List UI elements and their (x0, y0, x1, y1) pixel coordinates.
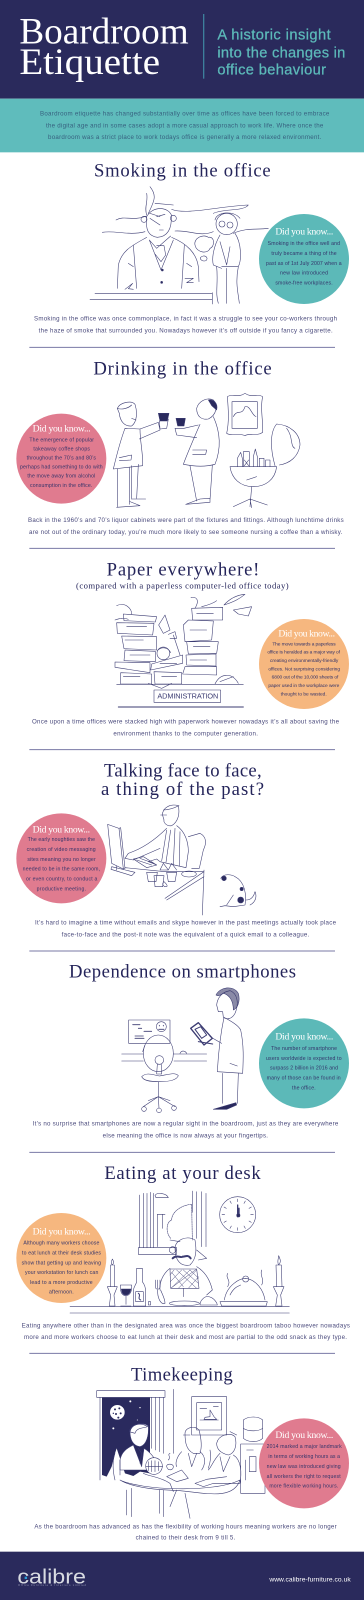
header banner (0, 0, 364, 99)
logo: Office Furniture & Interiors Limited (18, 1583, 87, 1587)
body text (34, 316, 338, 334)
callout: throughout the 70’s and 80’s (27, 456, 96, 462)
callout: your workstation for lunch can (25, 1270, 98, 1276)
callout: creating environmentally-friendly (270, 658, 339, 664)
body text: are not out of the ordinary today, you’re much more likely to see someone nursing a coffee than a whisky. (29, 529, 343, 536)
intro panel (0, 99, 364, 152)
callout: 2014 marked a major landmark (267, 1444, 342, 1450)
illustration: paper stacks (115, 594, 252, 707)
section: paper (32, 560, 349, 737)
callout: lead to a more productive (30, 1280, 93, 1286)
subtitle: A historic insight (217, 27, 331, 43)
callout: users worldwide is expected to (266, 1056, 342, 1062)
section: smartphones (33, 962, 349, 1139)
callout: new law introduced (280, 271, 328, 277)
intro panel: Boardroom etiquette has changed substantially over time as offices have been forced to embrace (40, 110, 330, 117)
callout: Did you know... (33, 825, 90, 836)
callout: Did you know... (33, 424, 91, 435)
callout: in terms of working hours as a (268, 1454, 340, 1460)
callout: smoke-free workplaces. (275, 280, 333, 286)
body text (22, 1322, 350, 1341)
body text (28, 517, 344, 536)
title (19, 10, 189, 82)
illustration: chef eating at desk (70, 1191, 289, 1313)
heading: Drinking in the office (93, 358, 272, 379)
callout: perhaps had something to do with (20, 465, 103, 471)
body text: else meaning the office is now always at your fingertips. (103, 1132, 268, 1139)
callout: truly became a thing of the (271, 251, 337, 257)
callout: thought to be wasted. (281, 691, 327, 697)
body text (33, 1121, 339, 1139)
callout: the move away from alcohol (27, 474, 95, 480)
footer (0, 1552, 364, 1600)
body text: Once upon a time offices were stacked high with paperwork however nowadays it’s all about saving the (32, 718, 340, 725)
callout: all workers the right to request (267, 1474, 341, 1480)
callout: to eat lunch at their desk studies (22, 1250, 101, 1256)
heading (101, 761, 264, 800)
website url: www.calibre-furniture.co.uk (268, 1576, 351, 1583)
night window (102, 1398, 150, 1477)
body text: more and more workers choose to eat lunch at their desk and most are partial to the odd snack as they type. (24, 1334, 347, 1341)
callout: paper used in the workplace were (268, 683, 340, 689)
callout: The emergence of popular (29, 438, 94, 444)
heading: Dependence on smartphones (69, 962, 296, 983)
callout: takeaway coffee shops (33, 447, 90, 453)
section: eating (16, 1163, 350, 1341)
intro panel: boardroom was a strict place to work todays office is generally a more relaxed environment. (48, 134, 322, 141)
section: face to face (16, 761, 337, 938)
body text (35, 920, 337, 938)
section: timekeeping (34, 1365, 349, 1542)
body text (32, 718, 340, 737)
callout (16, 414, 106, 504)
callout: many of those can be found in (267, 1076, 341, 1082)
illustration: smoking men (90, 187, 268, 304)
body text: Back in the 1960’s and 70’s liquor cabinets were part of the fixtures and fittings. Although lunchtime drinks (28, 517, 344, 524)
title: Boardroom (19, 10, 189, 51)
callout: Did you know... (275, 226, 333, 237)
callout (16, 1213, 106, 1303)
heading: Talking face to face, (104, 761, 262, 782)
callout: more flexible working hours. (269, 1484, 338, 1490)
illustration: man at computer (108, 805, 256, 915)
body text: face-to-face and the post-it note was the equivalent of a quick email to a colleague. (62, 931, 310, 938)
callout (259, 214, 349, 304)
illustration: men toasting and globe bar (113, 393, 300, 508)
callout: offices. Not surprising considering (268, 666, 340, 672)
callout: consumption in the office. (30, 483, 92, 489)
subtitle (217, 27, 345, 79)
callout: The number of smartphone (271, 1046, 337, 1052)
callout: productive meeting. (37, 886, 86, 892)
section: smoking (34, 161, 349, 334)
body text: Eating anywhere other than in the designated area was once the biggest boardroom taboo however nowadays (22, 1322, 350, 1329)
callout: the office. (292, 1085, 316, 1091)
callout: past as of 1st July 2007 when a (266, 261, 342, 267)
callout: office is heralded as a major way of (267, 650, 341, 656)
intro panel: the digital age and in some cases adopt a more casual approach to work life. Where once the (46, 122, 324, 129)
callout: Smoking in the office well and (268, 241, 340, 247)
illustration: meeting at night (97, 1389, 265, 1518)
section: drinking (16, 358, 344, 536)
body text: Smoking in the office was once commonplace, in fact it was a struggle to see your co-workers through (34, 316, 338, 323)
title: Etiquette (19, 41, 160, 82)
callout: The move towards a paperless (272, 641, 336, 647)
callout: sites meaning you no longer (27, 857, 96, 863)
callout (259, 1418, 349, 1508)
callout: Did you know... (275, 1031, 333, 1042)
body text (34, 1523, 337, 1542)
body text: the haze of smoke that surrounded you. Nowadays however it’s off outside if you fancy a cigarette. (39, 327, 333, 334)
logo: calibre (17, 1566, 86, 1588)
illustration: man with smartphone beside chair (122, 988, 243, 1113)
callout: Did you know... (33, 1226, 91, 1237)
callout: afternoon. (49, 1290, 74, 1296)
callout: creation of video messaging (27, 847, 96, 853)
body text: It’s no surprise that smartphones are now a regular sight in the boardroom, just as they are everywhere (33, 1121, 339, 1128)
callout: or even country, to conduct a (26, 877, 97, 883)
callout: Did you know... (275, 1430, 333, 1441)
callout: new law was introduced giving (267, 1464, 341, 1470)
subheading: (compared with a paperless computer-led office today) (76, 580, 289, 590)
callout: show that getting up and leaving (22, 1260, 101, 1266)
callout (16, 813, 106, 903)
subtitle: office behaviour (217, 63, 326, 79)
heading: Smoking in the office (94, 161, 271, 182)
callout: needed to be in the same room, (23, 867, 100, 873)
callout (259, 1018, 349, 1108)
heading: Paper everywhere! (107, 560, 259, 581)
body text: environment thanks to the computer generation. (113, 730, 258, 737)
callout: 6800 out of the 10,000 sheets of (272, 675, 339, 681)
body text: As the boardroom has advanced as has the flexibility of working hours meaning workers are no longer (34, 1523, 337, 1530)
callout: surpass 2 billion in 2016 and (270, 1066, 338, 1072)
callout (259, 619, 349, 709)
heading: Eating at your desk (104, 1163, 261, 1184)
body text: It’s hard to imagine a time without emails and skype however in the past meetings actually took place (35, 920, 337, 927)
body text: chained to their desk from 9 till 5. (136, 1535, 236, 1542)
callout: Did you know... (278, 628, 335, 639)
heading: Timekeeping (131, 1365, 233, 1386)
sign label: ADMINISTRATION (157, 692, 218, 701)
callout: Although many workers choose (23, 1241, 99, 1247)
subtitle: into the changes in (217, 45, 345, 61)
heading: a thing of the past? (101, 779, 264, 800)
callout: The early noughties saw the (28, 837, 95, 843)
